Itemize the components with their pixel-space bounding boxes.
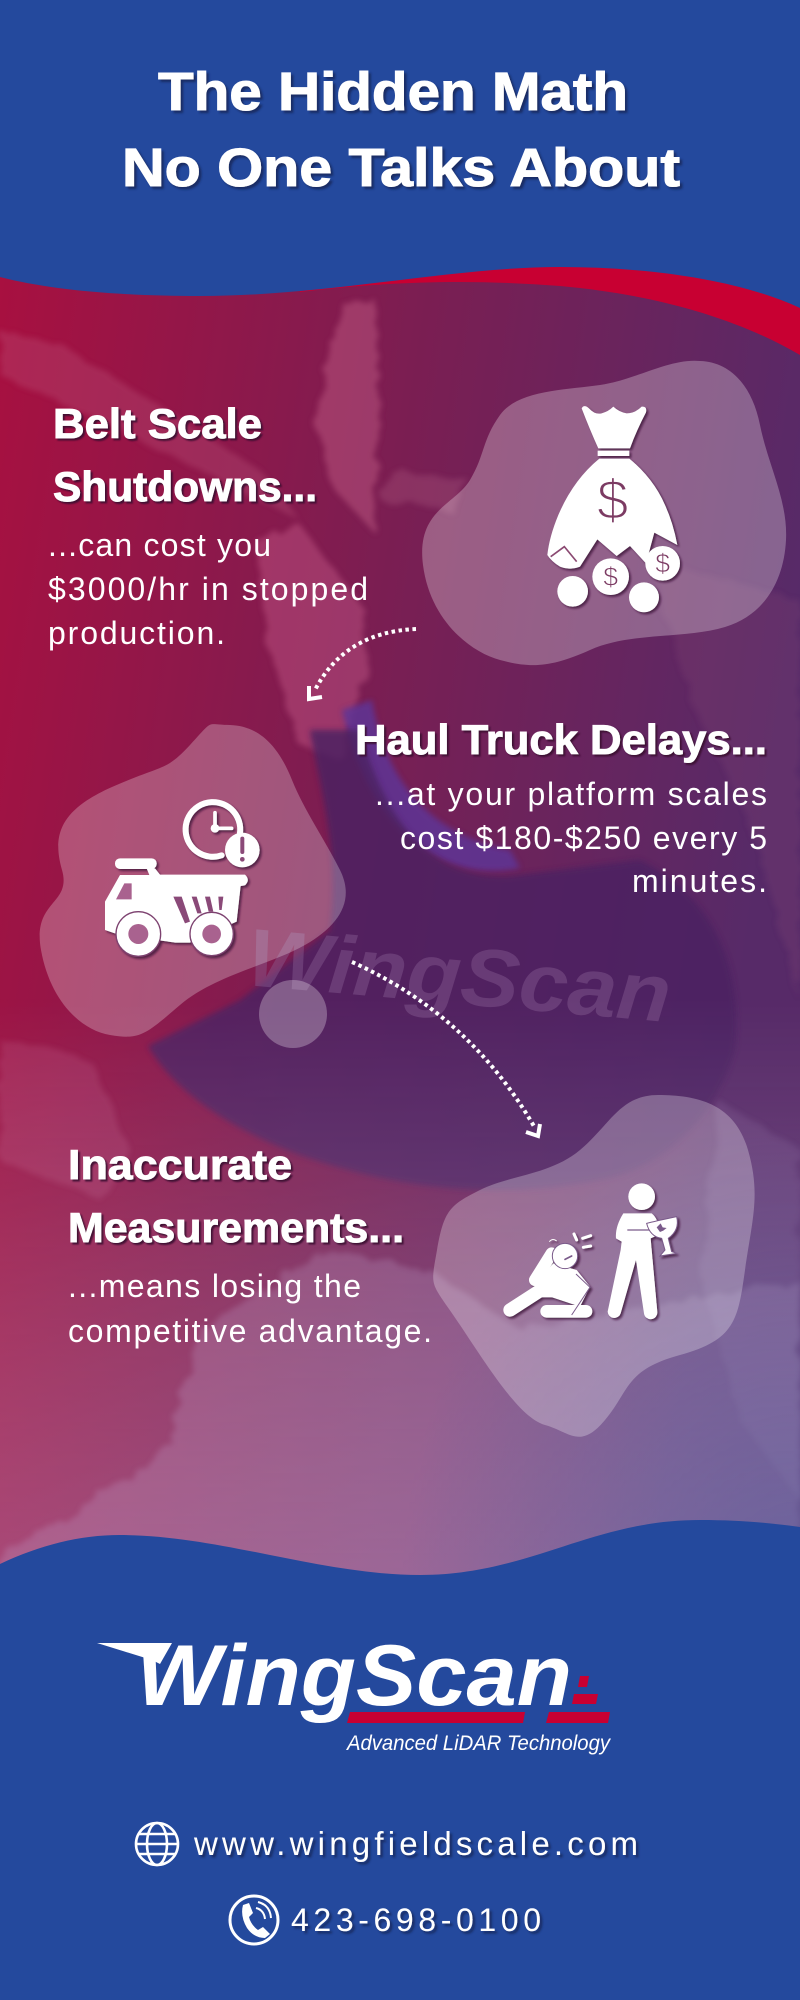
red wave accent [300,255,800,355]
body text: $3000/hr in stopped [48,571,368,607]
body text: cost $180-$250 every 5 [400,820,767,856]
icon: globe [136,1823,178,1865]
blue bottom wave [0,1520,800,2000]
heading: Belt Scale [53,400,262,447]
blob background [40,724,346,1037]
body text: production. [48,615,225,651]
logo: WingScan [97,1628,611,1755]
dark bucket [148,730,736,1190]
icon: loser sitting and winner with trophy [510,1183,677,1319]
blob background [433,1095,755,1437]
body text: competitive advantage. [68,1313,432,1349]
panel: haul truck delays [40,716,767,1048]
body text: ...means losing the [68,1268,361,1304]
icon: torn money bag: $ [603,562,618,592]
body text [48,527,368,651]
icon: torn money bag [547,406,680,612]
bright crescent of the bucket lip [342,700,520,871]
heading [68,1141,404,1251]
logo lettering on the bucket: WingScan [243,912,675,1040]
heading [53,400,317,510]
logo: WingScan: Advanced LiDAR Technology [345,1732,611,1755]
panel: belt scale shutdowns [48,361,786,665]
phone text: 423-698-0100 [291,1902,541,1938]
panel: inaccurate measurements [68,1095,755,1437]
body text: ...at your platform scales [375,776,767,812]
heading: Haul Truck Delays... [355,716,767,763]
background photo with gradient tint [0,270,800,1590]
blob background [422,361,786,665]
body text [375,776,767,899]
heading: Shutdowns... [53,463,317,510]
logo: WingScan: WingScan [136,1628,572,1724]
blue top wave [0,0,800,308]
icon: torn money bag: $ [655,549,670,579]
icon: phone [230,1896,278,1944]
title [122,62,680,198]
decorative blob dot [259,980,327,1048]
icon: torn money bag: $ [597,469,628,532]
title: The Hidden Math [158,62,628,122]
icon: dump truck with clock alert [105,802,260,956]
phone row [230,1896,541,1944]
website row [136,1823,638,1865]
heading: Inaccurate [68,1141,292,1188]
arrow: truck to measurements [352,962,540,1136]
title: No One Talks About [122,138,680,198]
website text: www.wingfieldscale.com [193,1825,638,1862]
arrow: belt to truck [309,629,416,699]
body text: minutes. [632,863,767,899]
heading: Measurements... [68,1204,404,1251]
body text: ...can cost you [48,527,271,563]
body text [68,1268,432,1349]
